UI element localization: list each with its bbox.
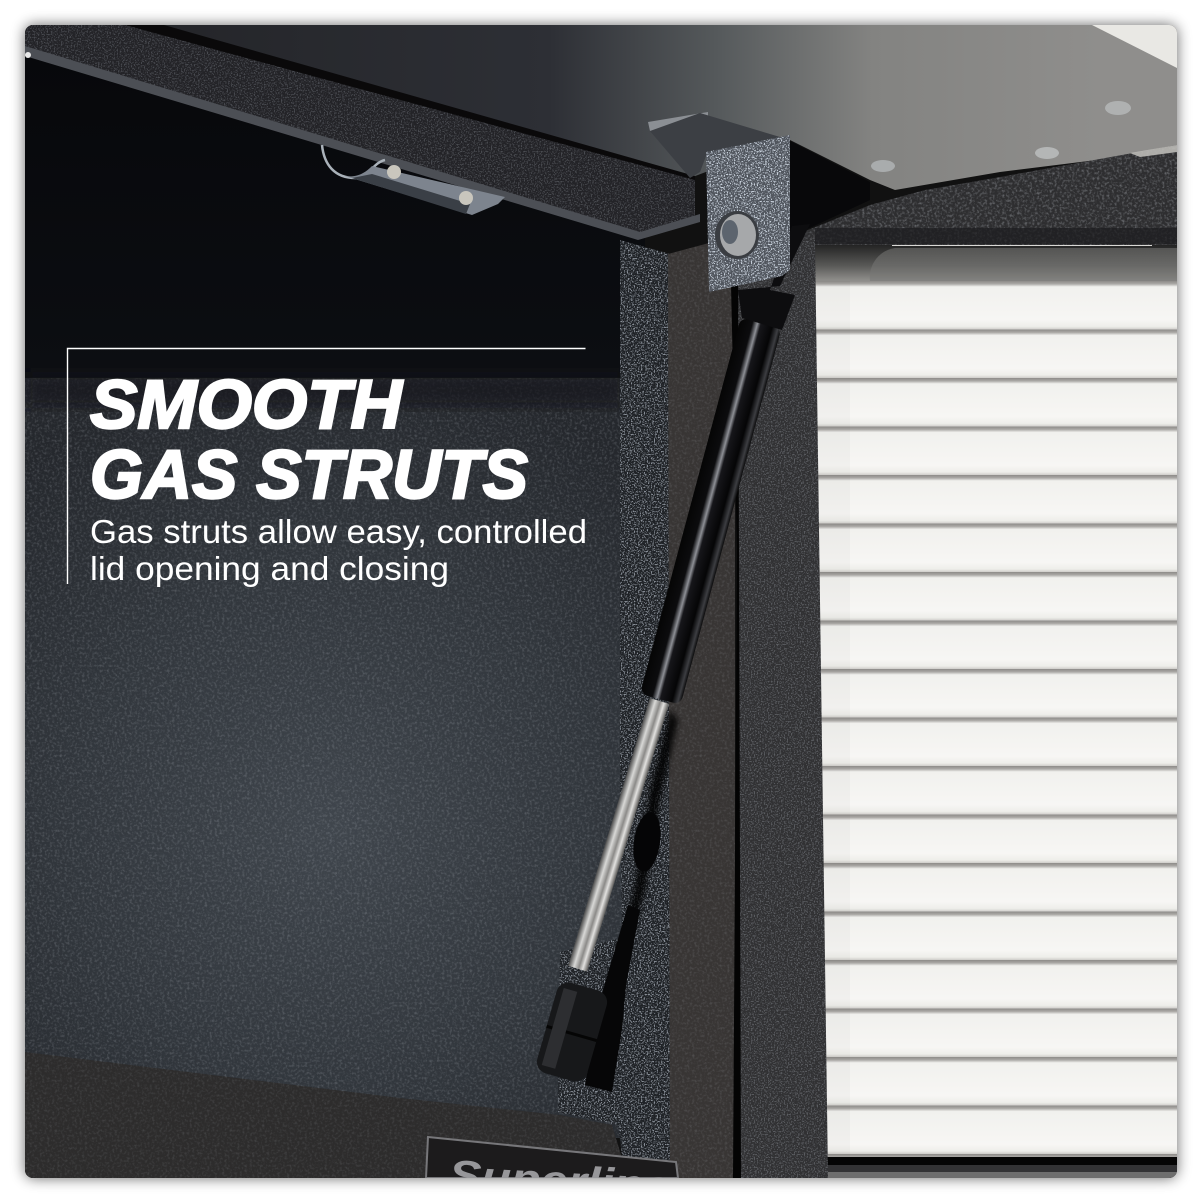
lid underside <box>130 25 1177 190</box>
description: lid opening and closing <box>90 550 449 587</box>
callout frame line <box>68 348 586 584</box>
black opening behind bracket <box>790 142 870 230</box>
gas strut rod <box>568 698 669 972</box>
top right white corner <box>1092 25 1177 68</box>
cabinet interior back wall <box>25 55 645 1138</box>
strut shadow on jamb <box>585 710 678 1092</box>
lid latch hardware <box>322 145 505 215</box>
white roller shutter <box>810 235 1177 1179</box>
heading <box>90 366 528 513</box>
lower cabinet drawer <box>25 1052 628 1178</box>
heading: GAS STRUTS <box>90 436 528 513</box>
lid screws <box>871 101 1131 172</box>
description: Gas struts allow easy, controlled <box>90 513 587 550</box>
strut top fitting <box>738 230 807 330</box>
bracket bolt <box>715 211 759 259</box>
gas strut cylinder <box>640 317 781 705</box>
left jamb speckled face <box>558 240 670 1160</box>
description <box>90 513 587 587</box>
heading: SMOOTH <box>90 366 404 443</box>
mounting bracket <box>648 112 790 292</box>
jamb gap line <box>731 286 741 1178</box>
jamb plain face <box>668 236 735 1178</box>
right top speckled frame <box>788 145 1177 245</box>
lid front edge band <box>25 25 700 240</box>
right frame post <box>738 240 828 1178</box>
strut end cap <box>536 982 607 1082</box>
brand badge <box>425 1136 679 1178</box>
text callout <box>68 348 587 587</box>
